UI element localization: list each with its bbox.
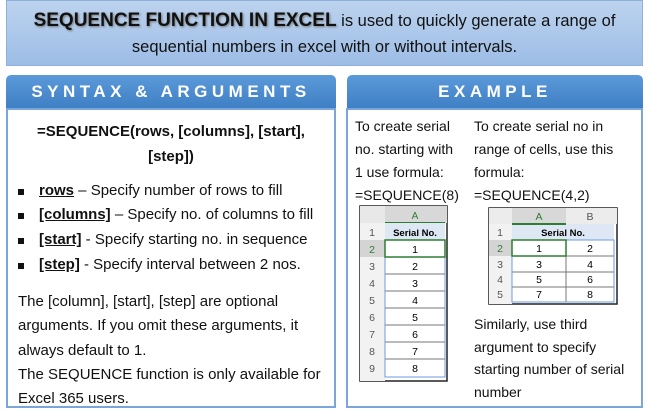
- table 1: [359, 205, 448, 382]
- table 1: 2: [369, 244, 375, 256]
- bullet list: [18, 182, 313, 273]
- note text: The SEQUENCE function is only available for: [18, 366, 321, 383]
- header: syntax: SYNTAX & ARGUMENTS: [31, 82, 311, 101]
- table 2: 6: [587, 274, 593, 286]
- table 1: 6: [369, 312, 375, 324]
- table 2: 3: [497, 259, 503, 271]
- bullet list: [start] - Specify starting no. in sequence: [39, 231, 307, 248]
- header: example: EXAMPLE: [438, 82, 552, 101]
- example text 1: =SEQUENCE(8): [355, 187, 459, 203]
- table 1: Serial No.: [393, 228, 437, 239]
- table 2: A: [535, 211, 543, 223]
- table 1: 3: [369, 261, 375, 273]
- table 2: 1: [497, 227, 503, 239]
- table 2: Serial No.: [541, 228, 585, 239]
- table 2: B: [586, 211, 594, 223]
- example text 1: [355, 118, 459, 203]
- example text 1: To create serial: [355, 118, 450, 134]
- example text 2: formula:: [474, 164, 525, 180]
- note text: [18, 293, 321, 407]
- table 1: 9: [369, 363, 375, 375]
- table 1: 3: [412, 278, 418, 290]
- table 2: 7: [536, 289, 542, 301]
- panel: syntax: [6, 108, 336, 408]
- table 1: 4: [369, 278, 375, 290]
- banner: [6, 0, 643, 66]
- bullet list: [step] - Specify interval between 2 nos.: [39, 256, 301, 273]
- table 2: 5: [497, 289, 503, 301]
- table 2: 8: [587, 289, 593, 301]
- table 1: 7: [412, 346, 418, 358]
- banner text: [34, 10, 616, 56]
- table 1: 1: [369, 227, 375, 239]
- table 2: 4: [497, 274, 503, 286]
- header: example: [347, 75, 643, 108]
- table 2: 2: [497, 243, 503, 255]
- table 2: 5: [536, 274, 542, 286]
- example text 2: =SEQUENCE(4,2): [474, 187, 590, 203]
- table 2: 1: [536, 243, 542, 255]
- table 1: 6: [412, 329, 418, 341]
- table 1: A: [412, 211, 419, 222]
- table 1: 2: [412, 261, 418, 273]
- header: syntax: [6, 75, 336, 108]
- note text: The [column], [start], [step] are optional: [18, 293, 278, 310]
- table 1: 1: [412, 244, 418, 256]
- bullet list: rows – Specify number of rows to fill: [39, 182, 282, 199]
- table 1: 4: [412, 295, 418, 307]
- note text: always default to 1.: [18, 342, 146, 359]
- formula: [37, 123, 305, 165]
- banner text: sequential numbers in excel with or without intervals.: [132, 38, 517, 56]
- banner text: SEQUENCE FUNCTION IN EXCEL is used to quickly generate a range of: [34, 10, 615, 31]
- panel: example: [346, 108, 643, 408]
- formula: [step]): [148, 148, 194, 165]
- similarly text: argument to specify: [474, 338, 596, 354]
- table 1: 5: [412, 312, 418, 324]
- table 2: 4: [587, 259, 593, 271]
- table 2: 2: [587, 243, 593, 255]
- similarly text: [474, 316, 624, 400]
- table 2: 3: [536, 259, 542, 271]
- example text 2: [474, 118, 613, 203]
- example text 2: To create serial no in: [474, 118, 603, 134]
- note text: arguments. If you omit these arguments, it: [18, 317, 298, 334]
- similarly text: number: [474, 384, 521, 400]
- example text 2: range of cells, use this: [474, 141, 613, 157]
- table 2: [488, 207, 618, 305]
- table 1: 8: [369, 346, 375, 358]
- formula: =SEQUENCE(rows, [columns], [start],: [37, 123, 305, 140]
- bullet list: [columns] – Specify no. of columns to fill: [39, 206, 313, 223]
- similarly text: Similarly, use third: [474, 316, 587, 332]
- table 1: 5: [369, 295, 375, 307]
- similarly text: starting number of serial: [474, 361, 624, 377]
- table 1: 7: [369, 329, 375, 341]
- table 1: 8: [412, 363, 418, 375]
- note text: Excel 365 users.: [18, 390, 129, 407]
- example text 1: 1 use formula:: [355, 164, 444, 180]
- example text 1: no. starting with: [355, 141, 453, 157]
